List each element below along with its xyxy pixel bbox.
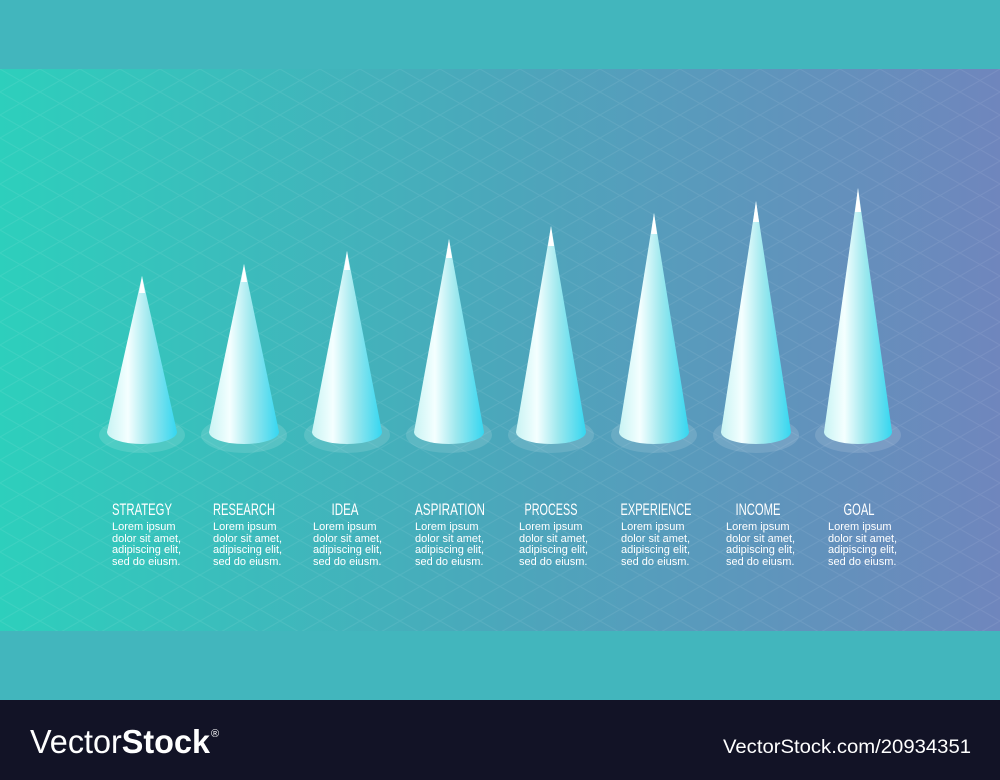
label: process: dolor sit amet, [519,533,588,545]
label: research: Lorem ipsum [213,521,277,533]
label: experience: adipiscing elit, [621,544,690,556]
label: process: PROCESS [524,500,578,519]
label: income: INCOME [736,500,780,519]
cone: goal [815,188,901,453]
cone: experience [611,213,697,453]
footer: ® [211,728,219,740]
footer url: VectorStock.com/20934351 [723,737,971,758]
label: research: RESEARCH [213,500,275,519]
label: goal: Lorem ipsum [828,521,892,533]
label: income: sed do eiusm. [726,556,794,568]
label: income: Lorem ipsum [726,521,790,533]
footer [0,700,1000,780]
label: research: dolor sit amet, [213,533,282,545]
label: goal: dolor sit amet, [828,533,897,545]
top band [0,0,1000,69]
label: research: sed do eiusm. [213,556,281,568]
cone: research [201,264,287,453]
label: experience: dolor sit amet, [621,533,690,545]
label: research: adipiscing elit, [213,544,282,556]
label: experience: EXPERIENCE [620,500,692,519]
bottom band [0,631,1000,700]
label: goal: sed do eiusm. [828,556,896,568]
label: idea: dolor sit amet, [313,533,382,545]
label: idea: IDEA [332,500,359,519]
label: experience: sed do eiusm. [621,556,689,568]
label: aspiration: sed do eiusm. [415,556,483,568]
label: idea: sed do eiusm. [313,556,381,568]
cone: process [508,226,594,453]
label: process: adipiscing elit, [519,544,588,556]
label: idea: adipiscing elit, [313,544,382,556]
main panel [0,69,1000,631]
label: experience [620,500,692,568]
label: goal: adipiscing elit, [828,544,897,556]
label: idea: Lorem ipsum [313,521,377,533]
label: aspiration: Lorem ipsum [415,521,479,533]
label: income [726,500,795,568]
label: income: adipiscing elit, [726,544,795,556]
label: experience: Lorem ipsum [621,521,685,533]
cone: aspiration [406,239,492,453]
label: aspiration: ASPIRATION [415,500,485,519]
label: aspiration: dolor sit amet, [415,533,484,545]
cone: idea [304,251,390,453]
label: process: sed do eiusm. [519,556,587,568]
label: strategy: Lorem ipsum [112,521,176,533]
label: aspiration [415,500,485,568]
label: process: Lorem ipsum [519,521,583,533]
label: strategy: adipiscing elit, [112,544,181,556]
label: goal [828,500,897,568]
label: aspiration: adipiscing elit, [415,544,484,556]
label: strategy: sed do eiusm. [112,556,180,568]
cone: income [713,201,799,453]
footer logo: VectorStock [30,723,211,760]
cone: strategy [99,276,185,453]
label: idea [313,500,382,568]
label: process [519,500,588,568]
label: income: dolor sit amet, [726,533,795,545]
label: research [213,500,282,568]
label: strategy: dolor sit amet, [112,533,181,545]
label: goal: GOAL [844,500,874,519]
label: strategy [112,500,181,568]
label: strategy: STRATEGY [112,500,172,519]
